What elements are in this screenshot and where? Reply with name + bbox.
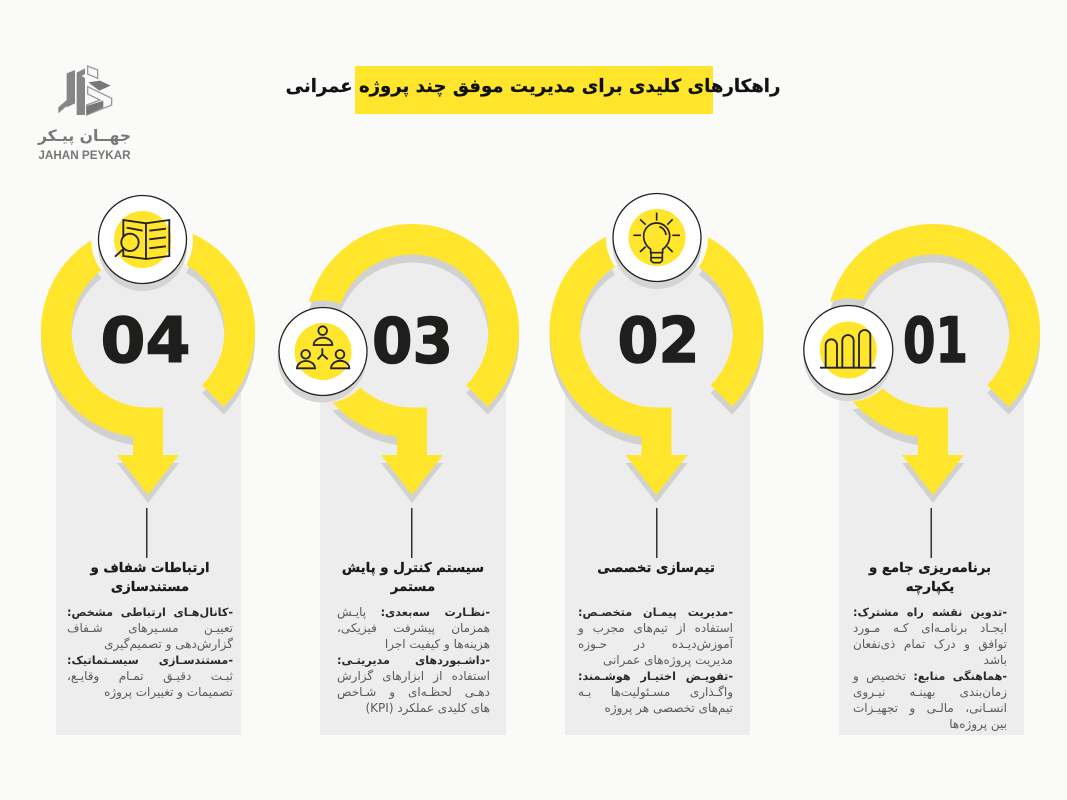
text block: step 03: استفاده از ابزارهای گزارش [337, 669, 490, 683]
text block: step 03 [337, 605, 490, 715]
text block: step 04 [67, 606, 233, 699]
heading: step 04: مستندسازی [111, 580, 189, 594]
text block: step 04: -مستندسـازی سیسـتماتیک: [67, 654, 233, 667]
connector line [656, 508, 658, 558]
panel: step 01 [803, 224, 1040, 735]
connector line [146, 508, 148, 558]
text block: step 02: آموزش‌دیـده در حـوزه [578, 637, 733, 651]
number 03: 03 [372, 304, 453, 378]
ring arrow [305, 224, 519, 495]
text block: step 03: های کلیدی عملکرد (KPI) [365, 701, 490, 715]
text block: step 03: دهـی لحظـه‌ای و شـاخص [337, 685, 490, 699]
heading: step 03: سیستم کنترل و پایش [342, 560, 484, 576]
text block: step 03: هزینه‌ها و کیفیت اجرا [385, 637, 490, 651]
heading: step 01 [868, 560, 991, 595]
heading: step 04 [90, 560, 210, 594]
heading: step 01: یکپارچه [906, 580, 954, 594]
text block: step 04: تعییـن مسـیرهای شـفاف [67, 621, 233, 635]
icon: team [278, 308, 367, 402]
logo: JAHAN PEYKAR [38, 149, 131, 162]
text block: step 02: استفاده از تیم‌های مجرب و [578, 621, 733, 635]
text block: step 03: -نظـارت سه‌بعدی: پایـش [337, 605, 490, 619]
text block: step 04: -کانال‌هـای ارتباطی مشخص: [67, 606, 233, 619]
icon: light bulb [612, 194, 702, 289]
number 01: 01 [903, 304, 968, 377]
text block: step 01: زمان‌بندی بهینـه نیـروی [853, 685, 1007, 699]
icon: arches [804, 306, 893, 401]
text block: step 01: ایجـاد برنامـه‌ای کـه مـورد [853, 621, 1007, 635]
ring arrow [41, 224, 255, 495]
number 02: 02 [618, 304, 700, 377]
text block: step 01: -تدوین نقشه راه مشترک: [853, 606, 1007, 619]
text block: step 04: تصمیمات و تغییرات پروژه [104, 685, 233, 699]
heading: step 04: ارتباطات شفاف و [90, 560, 210, 576]
text block: step 04: گزارش‌دهی و تصمیم‌گیری [104, 637, 233, 651]
panel: step 03 [278, 224, 520, 735]
connector line [930, 508, 932, 558]
logo: جهــان پیـکر [38, 127, 131, 145]
panel: step 02 [550, 192, 764, 735]
text block: step 02: مدیریت پروژه‌های عمرانی [603, 653, 733, 667]
text block: step 02: واگـذاری مسـئولیت‌ها بـه [578, 685, 733, 699]
ring arrow [550, 224, 764, 495]
text block: step 01 [852, 606, 1007, 731]
panel: step 04 [41, 194, 256, 735]
text block: step 02: -تفویـض اختیـار هوشـمند: [578, 670, 733, 683]
text block: step 01: توافق و درک تمام ذی‌نفعان [853, 637, 1007, 651]
heading: step 03: مستمر [391, 580, 435, 594]
heading: step 03 [342, 560, 484, 594]
number 04: 04 [100, 304, 190, 377]
heading: step 02: تیم‌سازی تخصصی [597, 560, 715, 576]
title banner [286, 66, 780, 114]
text block: step 03: -داشـبوردهای مدیریتـی: [337, 654, 490, 667]
text block: step 01: باشد [984, 653, 1007, 667]
logo [37, 65, 131, 162]
text block: step 01: انسـانی، مالـی و تجهیـزات [853, 701, 1007, 715]
icon: book and magnifier [98, 196, 187, 291]
text block: step 03: همزمان پیشرفت فیزیکی، [337, 621, 490, 635]
text block: step 02: تیم‌های تخصصی هر پروژه [605, 701, 733, 715]
ring arrow [826, 224, 1040, 495]
title banner: راهکارهای کلیدی برای مدیریت موفق چند پروژه عمرانی [286, 76, 780, 97]
text block: step 02 [578, 606, 734, 715]
connector line [411, 508, 412, 558]
text block: step 01: -هماهنگی منابع: تخصیص و [853, 669, 1007, 683]
text block: step 01: بین پروژه‌ها [949, 717, 1007, 731]
text block: step 02: -مدیریت پیمـان متخصـص: [578, 606, 733, 619]
text block: step 04: ثبـت دقیـق تمـام وقایـع، [67, 669, 233, 683]
heading: step 01: برنامه‌ریزی جامع و [869, 560, 991, 576]
